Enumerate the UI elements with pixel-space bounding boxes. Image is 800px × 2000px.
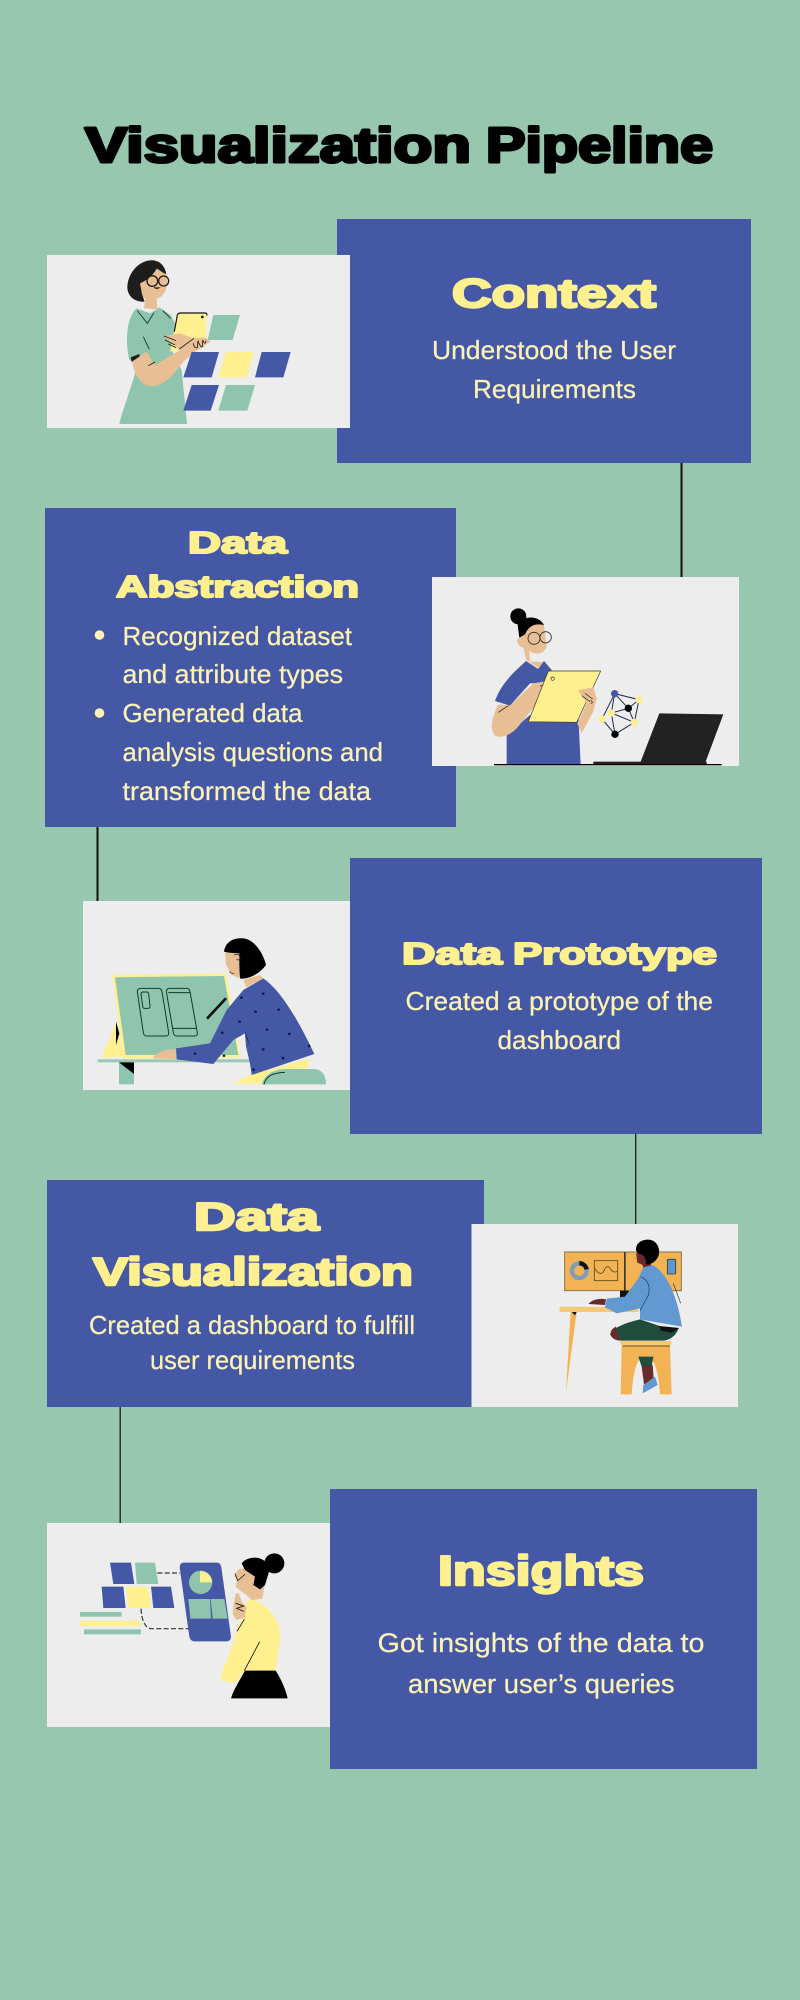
panel: data visualization (47, 1180, 738, 1407)
title: Pipeline (486, 119, 713, 173)
heading: data abstraction: Data (188, 525, 288, 560)
data abstraction card background (45, 508, 456, 827)
heading: data visualization (93, 1196, 413, 1294)
text: data prototype description (406, 986, 713, 1055)
connector: data abstraction to data prototype (96, 827, 98, 902)
bullet list: analysis questions and (122, 737, 383, 767)
heading: insights: Insights (438, 1547, 644, 1594)
panel: data prototype (83, 858, 762, 1134)
heading: data prototype (402, 936, 717, 971)
title: Visualization (85, 119, 471, 173)
text: data visualization description: user requirements (150, 1345, 355, 1375)
illustration: woman drawing a prototype on a tablet board (83, 901, 350, 1090)
bullet list: transformed the data (122, 776, 372, 806)
text: data prototype description: Created a prototype of the (406, 986, 713, 1016)
text: insights description: answer user’s queries (408, 1669, 674, 1699)
data visualization card background (47, 1180, 484, 1407)
illustration: man at desk with dashboard monitors (472, 1224, 738, 1407)
illustration: woman with notepad, network and laptop (432, 577, 739, 766)
connector: data prototype to data visualization (635, 1134, 636, 1225)
panel: context (47, 219, 751, 463)
text: data visualization description (89, 1310, 415, 1375)
text: context description (432, 335, 676, 404)
text: context description: Requirements (473, 374, 636, 404)
panel: data abstraction (45, 508, 739, 827)
bullet list: and attribute types (122, 659, 343, 689)
illustration: woman with tablet and sticky notes (47, 255, 350, 428)
bullet list (95, 621, 383, 806)
insights card background (330, 1489, 757, 1769)
connector: context to data abstraction (680, 463, 682, 578)
data prototype card background (350, 858, 762, 1134)
text: context description: Understood the User (432, 335, 676, 365)
context card background (337, 219, 751, 463)
illustration: woman thinking beside phone dashboard (47, 1523, 330, 1727)
heading: context: Context (452, 272, 656, 316)
heading: data abstraction (116, 525, 359, 604)
bullet list: Generated data (122, 698, 303, 728)
text: data prototype description: dashboard (498, 1025, 621, 1055)
heading: data prototype: Prototype (513, 936, 717, 971)
connector: data visualization to insights (120, 1407, 121, 1524)
title (85, 119, 713, 173)
bullet list: Recognized dataset (122, 621, 353, 651)
heading: data prototype: Data (402, 936, 503, 971)
heading: data abstraction: Abstraction (116, 569, 359, 604)
text: data visualization description: Created a dashboard to fulfill (89, 1310, 415, 1340)
panel: insights (47, 1489, 757, 1769)
text: insights description: Got insights of the data to (378, 1628, 704, 1658)
heading: data visualization: Data (194, 1196, 319, 1239)
heading: data visualization: Visualization (93, 1251, 413, 1294)
text: insights description (378, 1628, 704, 1699)
